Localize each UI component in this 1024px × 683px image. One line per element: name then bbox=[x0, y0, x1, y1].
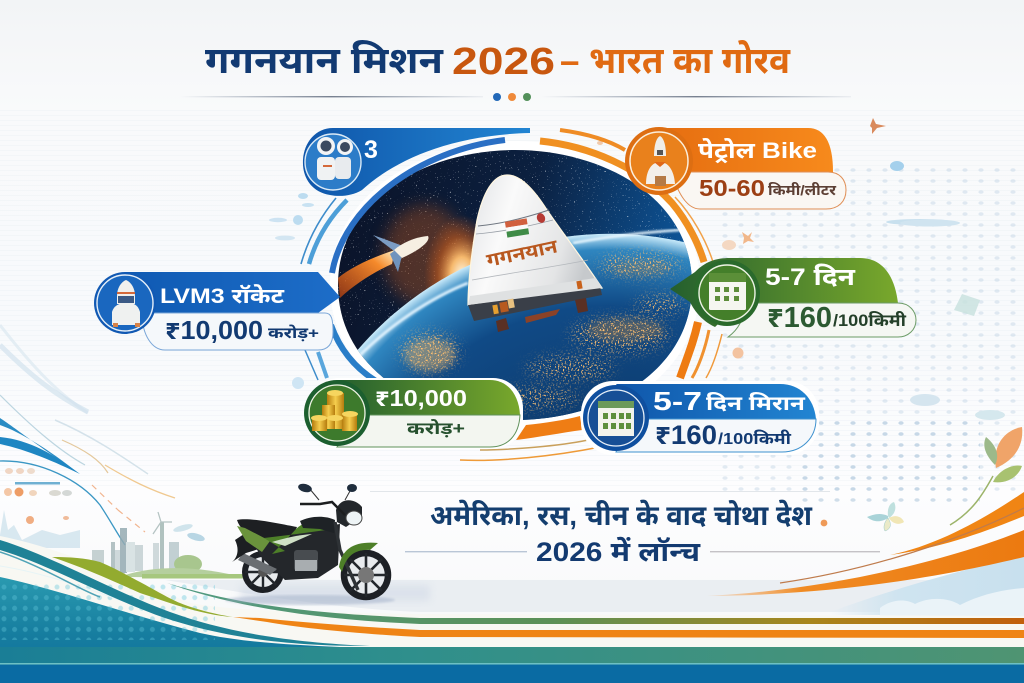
bike mileage: 50-60 bbox=[699, 175, 765, 201]
closing statement: 2026 में लॉन्च bbox=[536, 536, 701, 567]
stat: 5-7 days green: /100किमी bbox=[833, 310, 907, 330]
budget value: ₹10,000 bbox=[375, 385, 467, 411]
budget unit: करोड़+ bbox=[407, 418, 465, 438]
motorcycle bbox=[225, 482, 395, 605]
closing statement bbox=[370, 491, 880, 567]
crew value: 3 bbox=[364, 136, 378, 164]
left decorative dots bbox=[0, 468, 80, 548]
title bbox=[205, 40, 791, 83]
capsule name: गगनयान bbox=[485, 236, 560, 272]
stat: petrol bike bbox=[625, 127, 846, 209]
stat: petrol bike: किमी/लीटर bbox=[768, 182, 837, 198]
capsule bbox=[468, 175, 602, 332]
front wheel bbox=[344, 553, 388, 597]
closing statement: अमेरिका, रस, चीन के वाद चोथा देश bbox=[430, 498, 813, 531]
stat: budget coins bbox=[304, 378, 523, 449]
stat: mission duration blue: दिन मिरान bbox=[706, 391, 806, 415]
road bbox=[165, 580, 1024, 612]
stat: 5-7 days green bbox=[670, 258, 916, 337]
title: 2026 bbox=[452, 41, 555, 83]
mini rocket with flame bbox=[338, 235, 428, 298]
stat: LVM3 rocket: करोड़+ bbox=[268, 325, 319, 342]
mission cost: ₹160 bbox=[655, 420, 717, 450]
rear wheel bbox=[245, 554, 281, 590]
icon: bike rocket mascot bbox=[625, 127, 693, 195]
icon: gold coins bbox=[304, 380, 370, 446]
bottom sky clouds right bbox=[830, 556, 1024, 616]
icon: blue calendar bbox=[583, 385, 649, 451]
title: – भारत का गोरव bbox=[560, 40, 791, 81]
stat: mission duration blue: /100किमी bbox=[718, 430, 791, 448]
leaf sprig bbox=[950, 427, 1022, 525]
title: गगनयान मिशन bbox=[205, 40, 444, 81]
title divider with three dots bbox=[180, 93, 851, 101]
butterfly bbox=[867, 502, 904, 531]
fuel cost: ₹160 bbox=[767, 302, 832, 334]
motorcycle body bbox=[232, 482, 378, 590]
capsule flag bbox=[505, 218, 529, 238]
icon: rocket mascot bbox=[94, 272, 156, 334]
stat: mission duration blue bbox=[581, 381, 819, 455]
bottom stripes bbox=[0, 536, 1024, 683]
decorative splashes left of circle bbox=[269, 193, 314, 389]
orange rings bbox=[460, 130, 722, 460]
left decorative swooshes bbox=[0, 325, 175, 545]
decorative watercolour splashes right bbox=[597, 118, 1005, 420]
earth bbox=[358, 228, 692, 420]
LVM3 heading: LVM3 रॉकेट bbox=[160, 284, 285, 308]
icon: calendar bbox=[694, 260, 760, 326]
icon: astronauts bbox=[305, 134, 361, 190]
city skyline and wind turbine bbox=[92, 512, 244, 578]
bike heading: पेट्रोल Bike bbox=[698, 138, 817, 164]
central space image bbox=[330, 145, 698, 426]
orange swooshes right bbox=[707, 492, 1024, 596]
stat: LVM3 rocket bbox=[94, 272, 340, 350]
mission heading: 5-7 bbox=[653, 386, 702, 416]
stat: crew count bbox=[303, 128, 530, 196]
blue rings bbox=[301, 140, 505, 381]
days heading: 5-7 दिन bbox=[765, 263, 856, 291]
LVM3 cost: ₹10,000 bbox=[165, 315, 263, 345]
